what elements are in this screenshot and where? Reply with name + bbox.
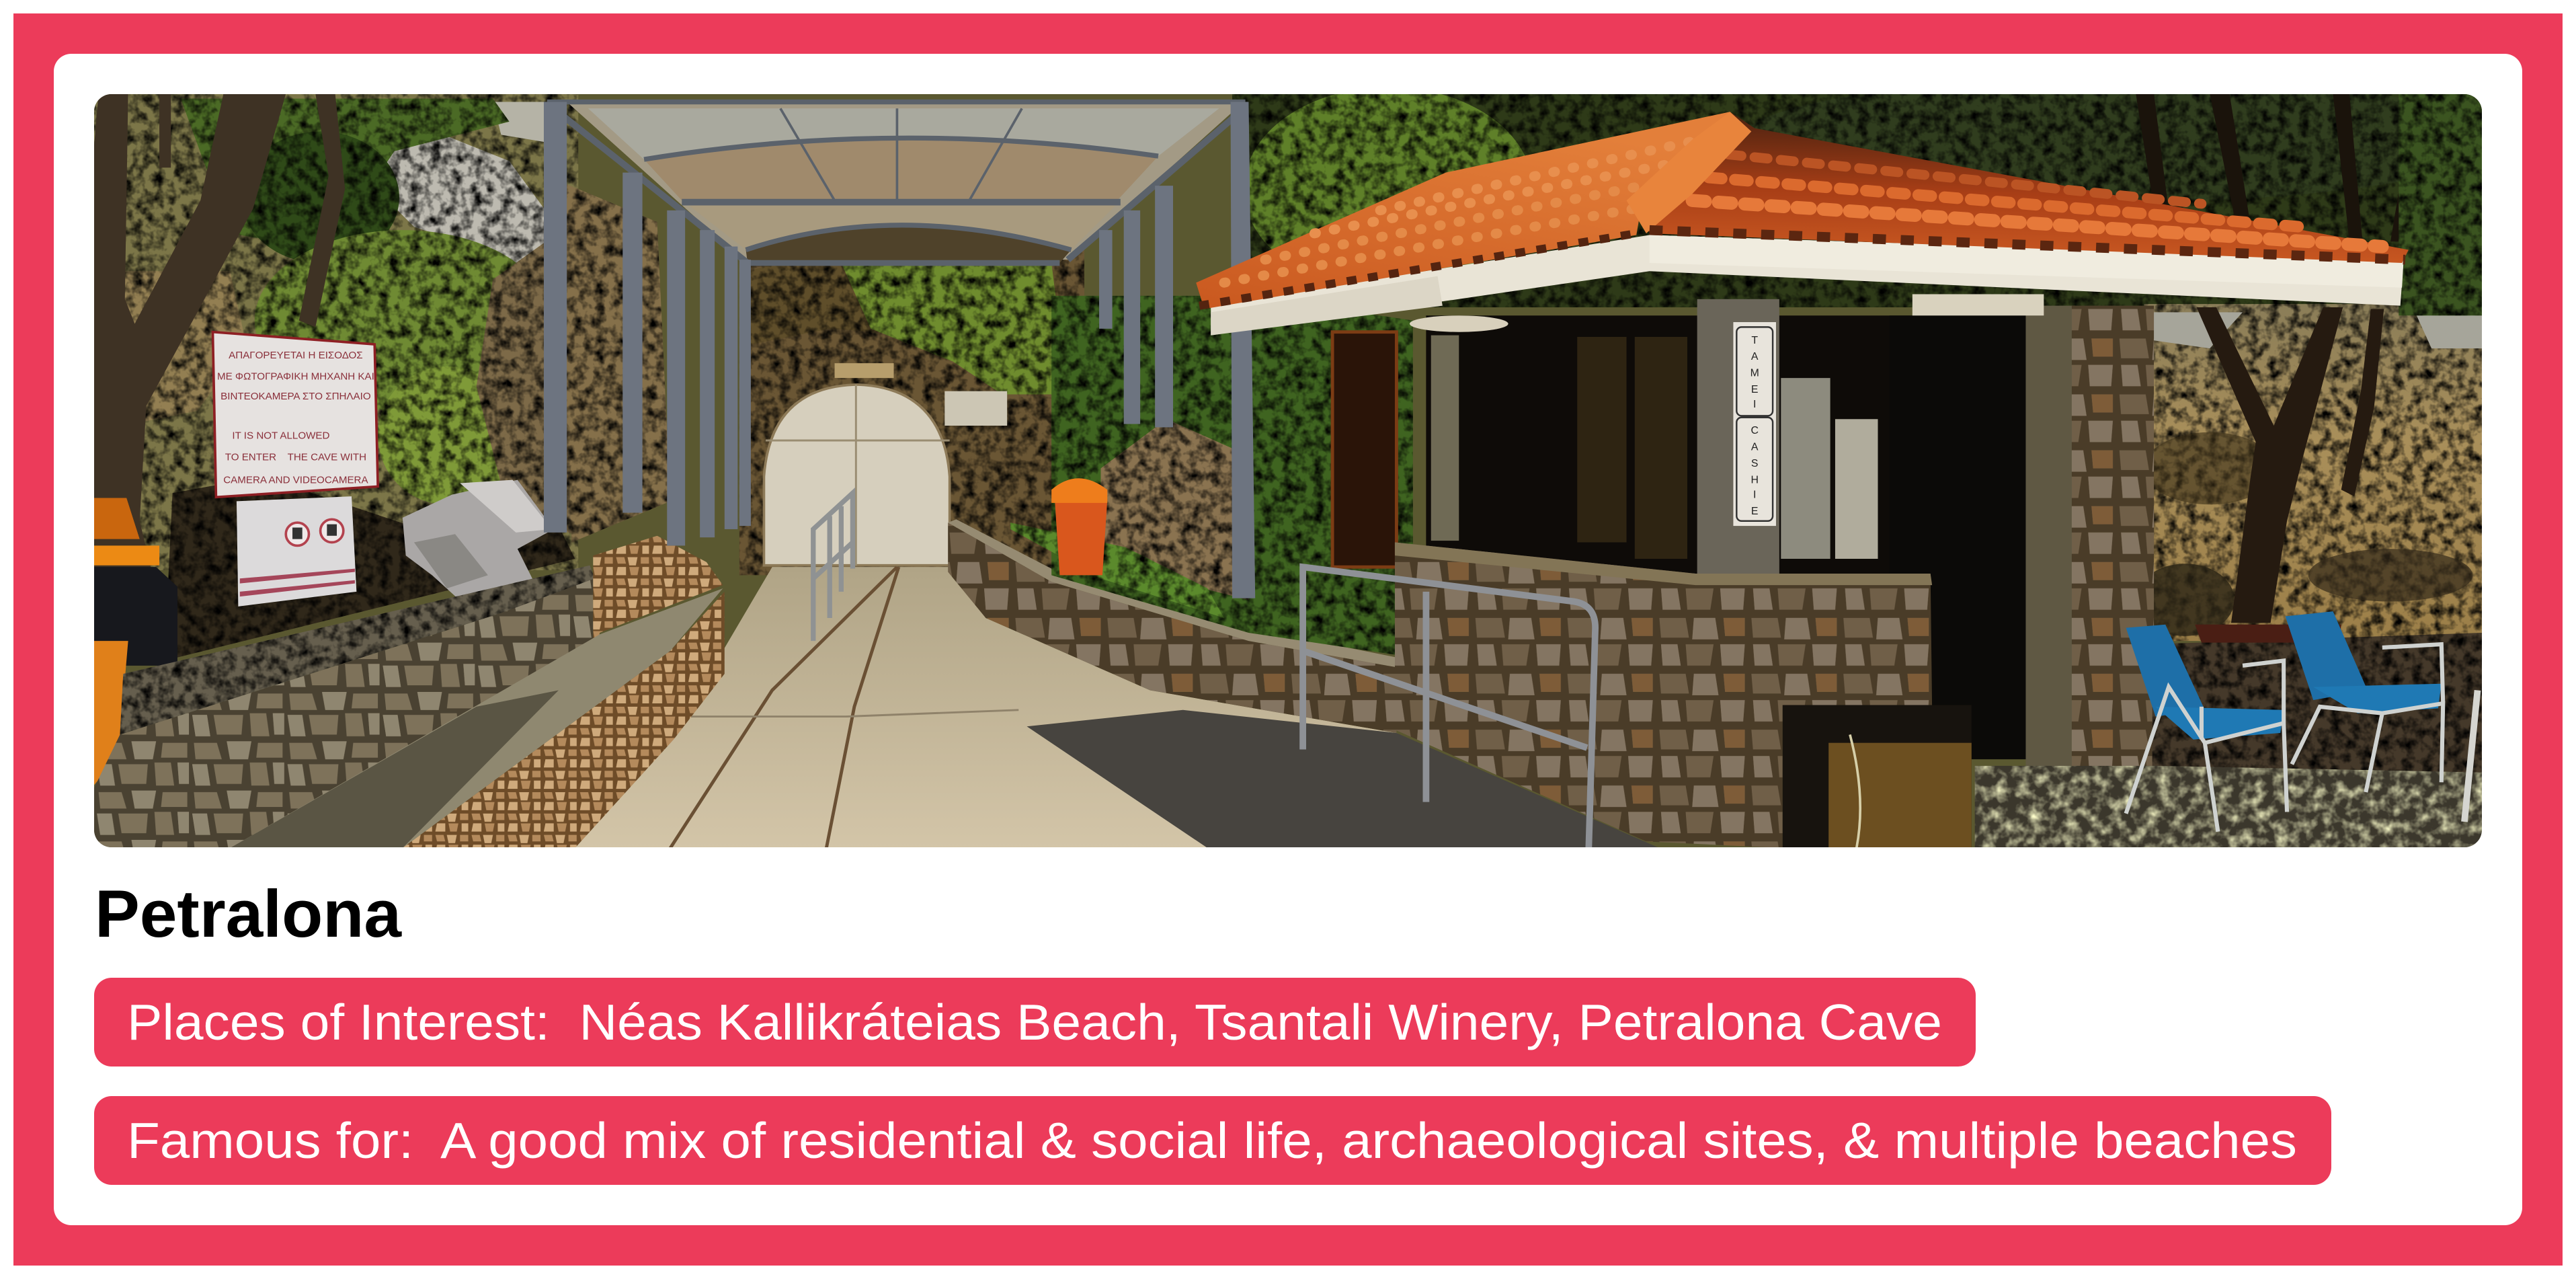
lower stone wall and ledge, left: [230, 588, 725, 848]
cashier label: T: [1751, 335, 1758, 346]
warning sign board: ΒΙΝΤΕΟΚΑΜΕΡΑ ΣΤΟ ΣΠΗΛΑΙΟ: [220, 391, 371, 402]
cashier label: I: [1753, 399, 1756, 410]
kiosk wooden notice board: [1332, 332, 1396, 567]
cashier label: S: [1751, 458, 1758, 469]
concrete path: [575, 567, 1398, 847]
pill: famous for: [94, 1096, 2331, 1185]
tree foliage, upper right: [1232, 77, 2497, 307]
kiosk terracotta roof: [1643, 112, 2409, 263]
orange rubbish bin, centre: [1051, 478, 1107, 575]
tree trunk, right: [2197, 307, 2384, 623]
metal railing by kiosk: [1303, 567, 1595, 848]
kiosk stone counter wall: [1395, 543, 1932, 848]
warning sign board: CAMERA AND VIDEOCAMERA: [223, 475, 369, 486]
kiosk white fascia: [1211, 235, 2404, 336]
warning sign board: ΑΠΑΓΟΡΕΥΕΤΑΙ Η ΕΙΣΟΔΟΣ: [229, 350, 363, 361]
cashier label: I: [1753, 490, 1756, 501]
upper stone wall, left: [93, 536, 723, 848]
cashier label: C: [1750, 425, 1759, 436]
kiosk stone pillar: [2025, 306, 2075, 774]
ticket kiosk: [1196, 112, 2409, 848]
kiosk grey pillar: [1697, 299, 1779, 578]
hand rail in centre of path: [813, 493, 852, 641]
grey boulders: [402, 480, 548, 596]
pill: places of interest: Places of Interest: Néas Kallikráteias Beach, Tsantali Winery, Petralona Cave: [127, 994, 1942, 1050]
blue chair, back: [2286, 611, 2478, 822]
glass canopy over walkway: [547, 102, 1246, 263]
blue chair, front: [2126, 625, 2287, 832]
arched cave door: [764, 363, 1007, 566]
cashier label: A: [1751, 351, 1759, 362]
pill: places of interest: [94, 978, 1976, 1067]
cashier label: E: [1751, 384, 1758, 395]
amplifier box: [1783, 705, 1972, 848]
rubbish bin, left: [93, 498, 177, 785]
title: Petralona: Petralona: [95, 876, 402, 951]
kiosk black door: [1890, 315, 2027, 759]
pill: famous for: Famous for: A good mix of residential & social life, archaeological sites, & multiple beaches: [127, 1112, 2297, 1169]
cashier label: [1733, 322, 1776, 526]
cashier label: H: [1750, 475, 1759, 486]
path rails: [670, 567, 1018, 848]
hillside, right: [2136, 93, 2489, 641]
stone wall and ground behind chairs: [1975, 633, 2484, 848]
canopy support columns: [544, 102, 1255, 598]
warning sign board: TO ENTER THE CAVE WITH: [225, 451, 366, 463]
cashier label: M: [1750, 368, 1759, 379]
stone wall, right of path: [948, 519, 1396, 733]
photo background: [93, 93, 2484, 850]
warning sign board: [212, 332, 378, 497]
hillside with rocks and bushes, left: [93, 93, 670, 660]
photo: Petralona cave entrance and ticket kiosk: [63, 77, 2497, 850]
tree trunks, left: [94, 94, 345, 568]
kiosk dark windows: [1426, 315, 2031, 578]
cafe table: [2195, 625, 2341, 643]
cashier label: E: [1751, 506, 1758, 517]
foliage beside kiosk: [1010, 296, 1413, 658]
cashier label: A: [1751, 442, 1759, 453]
warning sign board: IT IS NOT ALLOWED: [232, 430, 329, 442]
shadow on path: [1027, 710, 1659, 848]
cave rock face and vines: [739, 247, 1084, 575]
warning sign board: ΜΕ ΦΩΤΟΓΡΑΦΙΚΗ ΜΗΧΑΝΗ ΚΑΙ: [217, 371, 374, 383]
no photography sign: [237, 496, 356, 607]
